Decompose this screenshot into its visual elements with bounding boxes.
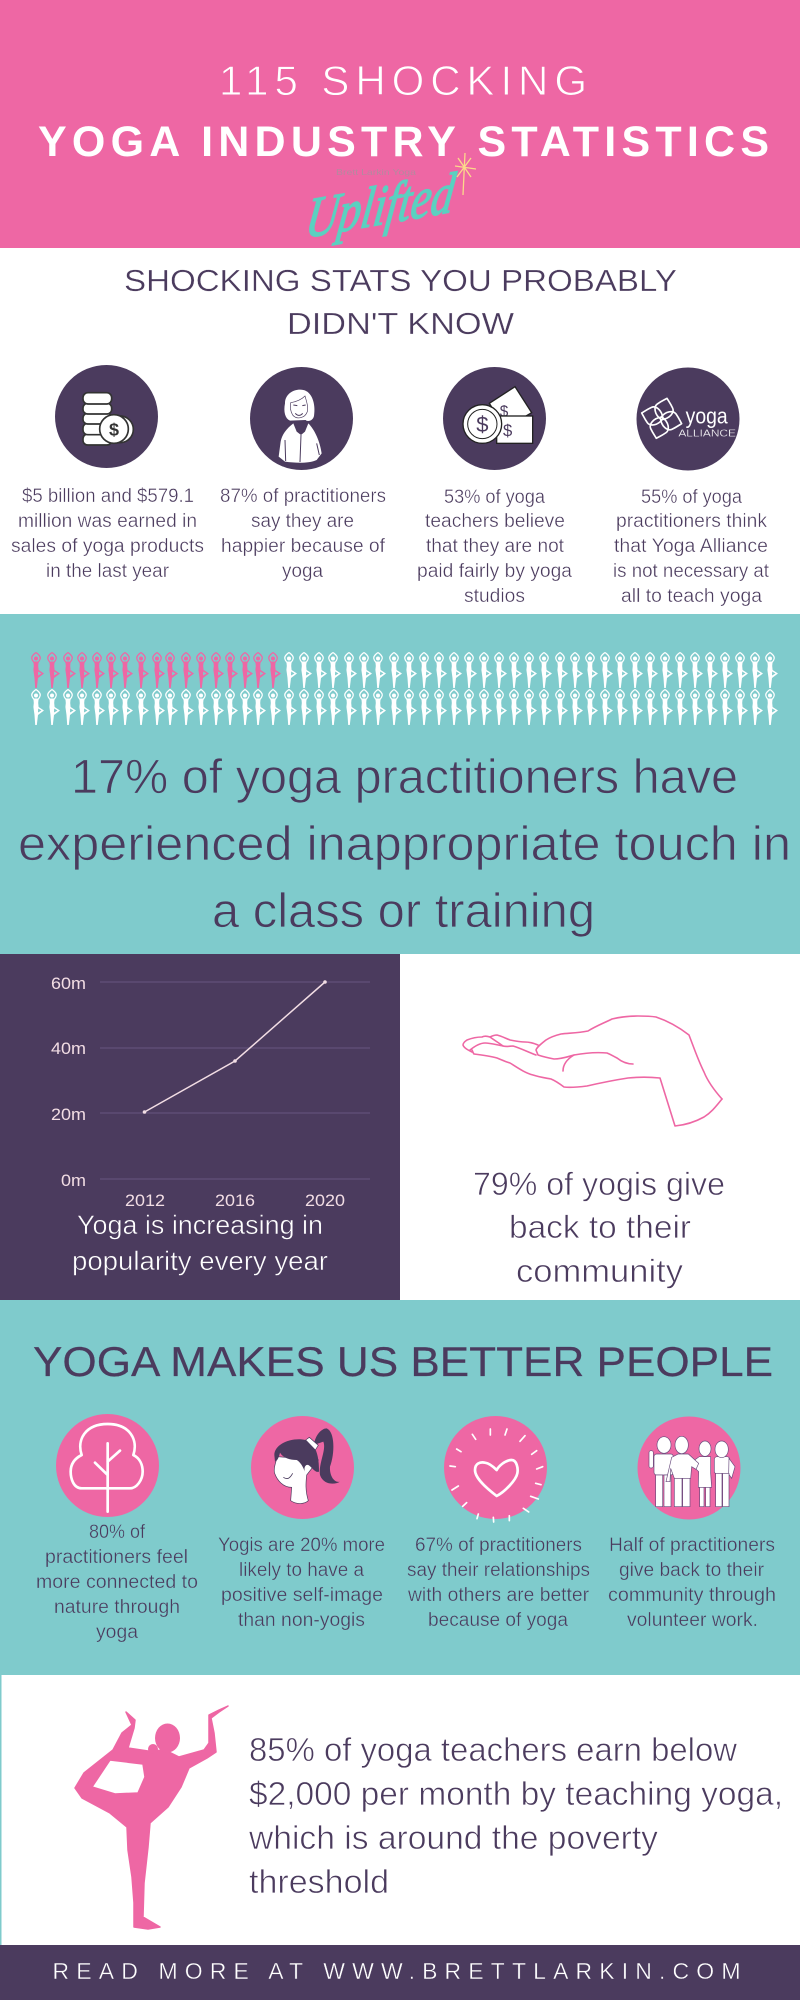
line chart: 60m	[51, 974, 86, 993]
text: yoga alliance stat: practitioners think	[616, 511, 768, 532]
text: sales stat	[11, 486, 204, 582]
icon: money: $	[503, 421, 512, 440]
text: volunteer stat: volunteer work.	[627, 1610, 758, 1631]
panel: popularity chart	[0, 954, 400, 1300]
line chart: 2020	[305, 1191, 345, 1210]
text: self-image stat	[218, 1535, 385, 1631]
heading: SHOCKING STATS YOU PROBABLY	[124, 263, 677, 298]
text: relationships stat	[407, 1535, 590, 1631]
text: relationships stat: 67% of practitioners	[415, 1535, 582, 1556]
stat: volunteer	[608, 1416, 776, 1631]
text: paid fairly stat: teachers believe	[425, 511, 565, 532]
text: chart caption: Yoga is increasing in	[77, 1210, 323, 1240]
icon: coins	[83, 393, 133, 445]
logo: Brett Larkin Yoga Uplifted: Brett Larkin Yoga	[336, 167, 416, 177]
text: 79% statistic: community	[516, 1253, 683, 1289]
text: relationships stat: because of yoga	[428, 1610, 568, 1631]
icon: tree	[71, 1424, 143, 1512]
stat: self-image	[218, 1416, 385, 1631]
title: YOGA INDUSTRY STATISTICS	[38, 118, 769, 166]
icon: yoga alliance logo: yoga	[686, 403, 728, 428]
text: chart caption	[72, 1210, 328, 1276]
text: happier stat	[220, 486, 386, 582]
text: 85% statistic: $2,000 per month by teaching yoga,	[249, 1775, 783, 1812]
logo: Brett Larkin Yoga Uplifted: Uplifted	[302, 161, 459, 251]
text: chart caption: popularity every year	[72, 1246, 328, 1276]
text: paid fairly stat: paid fairly by yoga	[417, 561, 572, 582]
text: nature stat: practitioners feel	[45, 1547, 188, 1568]
stat: relationships	[407, 1416, 590, 1631]
text: 85% statistic: threshold	[249, 1863, 389, 1900]
icon: money: $	[500, 404, 509, 421]
text: paid fairly stat: that they are not	[426, 536, 565, 557]
stat: happier	[220, 367, 386, 582]
text: 17% statistic	[18, 751, 791, 938]
text: 79% statistic: 79% of yogis give	[473, 1166, 725, 1202]
text: happier stat: yoga	[282, 561, 323, 582]
line chart: 40m	[51, 1039, 86, 1058]
text: self-image stat: positive self-image	[221, 1585, 383, 1606]
line chart: 2012	[125, 1191, 165, 1210]
text: volunteer stat	[608, 1535, 776, 1631]
text: relationships stat: say their relationships	[407, 1560, 590, 1581]
text: 85% statistic: 85% of yoga teachers earn below	[249, 1731, 737, 1768]
text: volunteer stat: Half of practitioners	[609, 1535, 775, 1556]
text: yoga alliance stat: that Yoga Alliance	[614, 536, 768, 557]
heading	[124, 263, 677, 341]
text: 79% statistic: back to their	[509, 1209, 691, 1245]
icon: dancer pose silhouette	[75, 1706, 228, 1929]
icon: money	[463, 387, 533, 443]
heading: YOGA MAKES US BETTER PEOPLE	[33, 1338, 773, 1385]
stat: nature	[36, 1414, 198, 1643]
panel: giving back	[400, 954, 800, 1300]
line chart	[51, 974, 370, 1210]
text: paid fairly stat	[417, 487, 572, 607]
icon: yoga alliance logo: ALLIANCE	[678, 429, 736, 440]
text: nature stat	[36, 1522, 198, 1643]
line chart: 2016	[215, 1191, 255, 1210]
footer: READ MORE AT WWW.BRETTLARKIN.COM	[52, 1958, 740, 1984]
text: self-image stat: likely to have a	[239, 1560, 364, 1581]
text: happier stat: say they are	[251, 511, 354, 532]
title	[38, 57, 769, 166]
title: 115 SHOCKING	[219, 57, 587, 104]
icon: coins: $	[109, 419, 119, 439]
stat: paid fairly	[417, 367, 572, 607]
icon: heart with rays	[450, 1429, 543, 1522]
text: 17% statistic: a class or training	[212, 885, 595, 938]
footer	[0, 1945, 800, 2000]
text: happier stat: 87% of practitioners	[220, 486, 386, 507]
text: 85% statistic: which is around the poverty	[248, 1819, 658, 1856]
text: nature stat: yoga	[96, 1622, 138, 1643]
text: yoga alliance stat: 55% of yoga	[641, 487, 742, 508]
text: 17% statistic: experienced inappropriate touch in	[18, 818, 791, 871]
icon: group of people	[649, 1436, 735, 1507]
text: self-image stat: Yogis are 20% more	[218, 1535, 385, 1556]
stat: yoga alliance	[613, 368, 770, 607]
text: volunteer stat: community through	[608, 1585, 776, 1606]
text: 85% statistic	[248, 1731, 783, 1900]
text: nature stat: 80% of	[89, 1522, 146, 1543]
text: sales stat: million was earned in	[18, 511, 197, 532]
text: nature stat: nature through	[54, 1597, 180, 1618]
text: paid fairly stat: 53% of yoga	[444, 487, 545, 508]
text: sales stat: $5 billion and $579.1	[22, 486, 194, 507]
line chart: 20m	[51, 1105, 86, 1124]
text: relationships stat: with others are better	[407, 1585, 590, 1606]
text: paid fairly stat: studios	[464, 586, 525, 607]
text: yoga alliance stat	[613, 487, 770, 607]
line chart: 0m	[61, 1171, 86, 1190]
text: sales stat: in the last year	[46, 561, 170, 582]
panel: shocking stats	[0, 248, 800, 614]
text: happier stat: happier because of	[221, 536, 386, 557]
stat: sales	[11, 365, 204, 582]
text: 79% statistic	[473, 1166, 725, 1289]
pictogram: 100 yoga figures, 17 pink	[32, 652, 778, 725]
icon: money: $	[476, 412, 488, 437]
icon: yoga alliance logo	[639, 396, 736, 441]
heading: DIDN'T KNOW	[287, 306, 515, 341]
text: yoga alliance stat: is not necessary at	[613, 561, 770, 582]
text: volunteer stat: give back to their	[619, 1560, 765, 1581]
text: yoga alliance stat: all to teach yoga	[621, 586, 762, 607]
icon: woman with ponytail	[274, 1428, 340, 1504]
text: nature stat: more connected to	[36, 1572, 198, 1593]
text: 17% statistic: 17% of yoga practitioners have	[71, 751, 738, 804]
icon: open hand	[463, 1016, 722, 1126]
text: self-image stat: than non-yogis	[238, 1610, 365, 1631]
text: sales stat: sales of yoga products	[11, 536, 204, 557]
panel: header banner	[0, 0, 800, 251]
panel: teacher earnings	[0, 1675, 800, 1945]
panel: yoga makes us better people	[0, 1300, 800, 1675]
icon: woman	[279, 390, 322, 463]
panel: inappropriate touch statistic	[0, 614, 800, 954]
